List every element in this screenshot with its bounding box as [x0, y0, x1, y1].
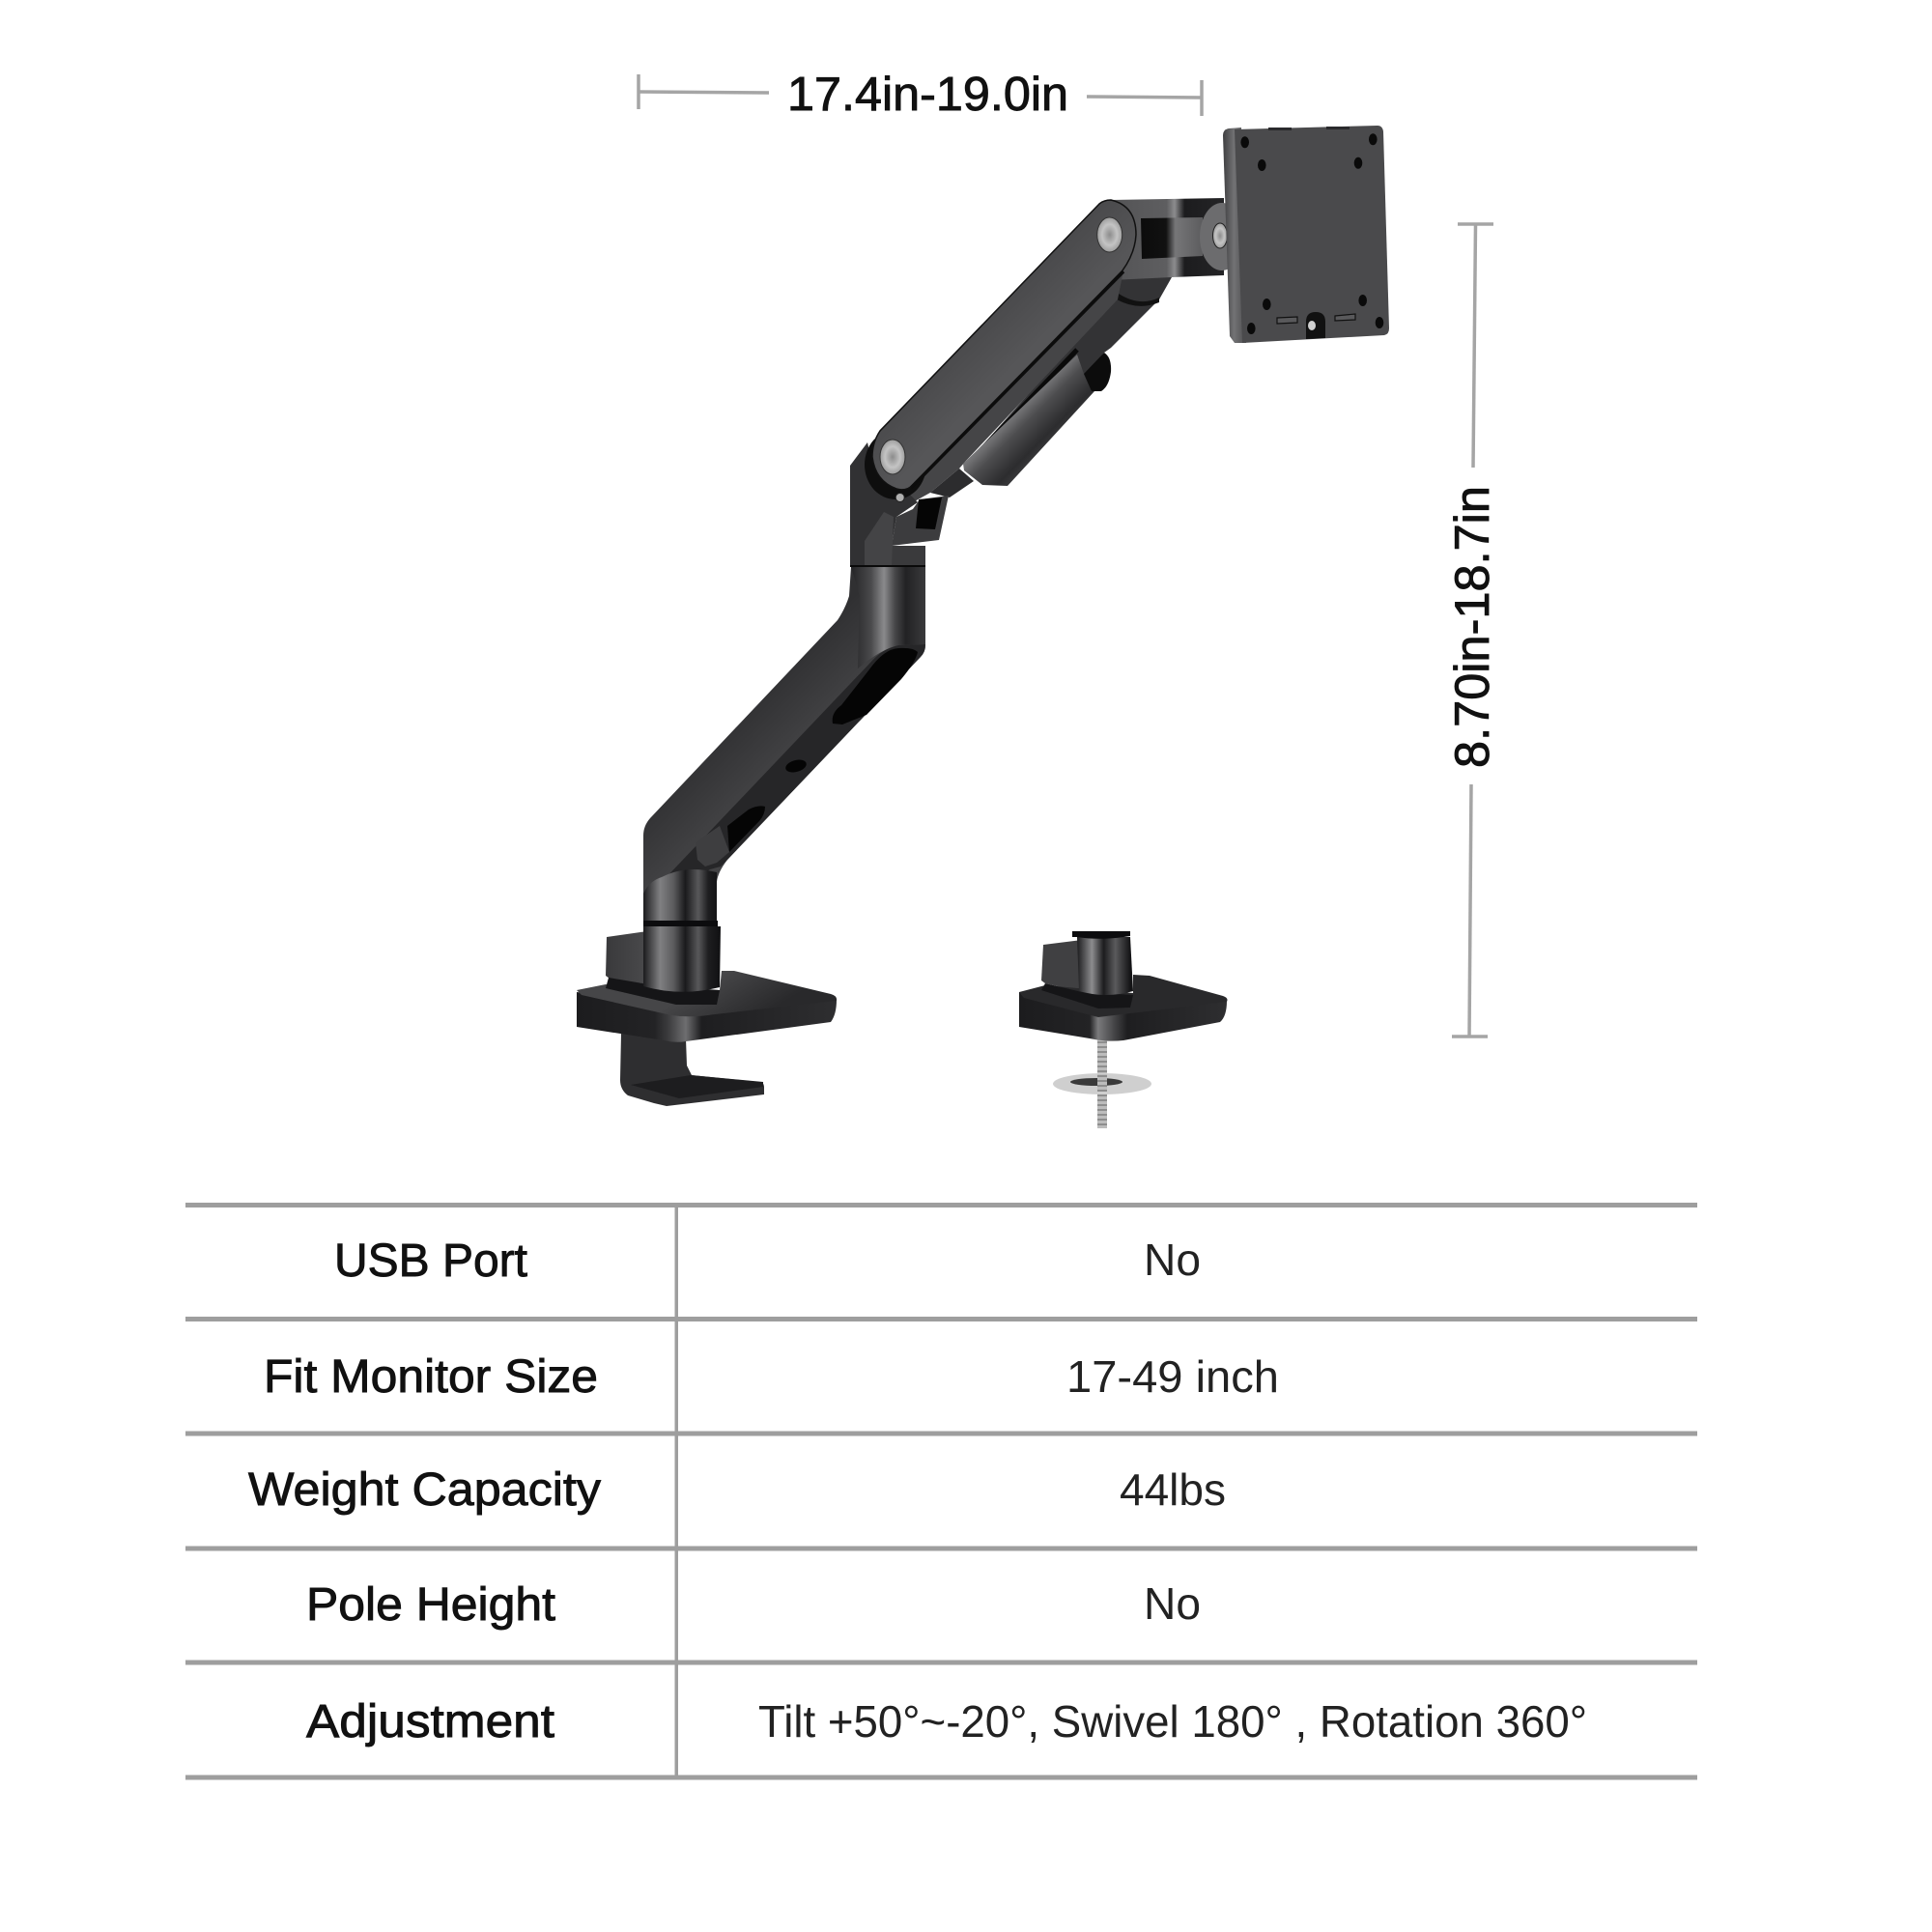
width dimension value: 17.4in-19.0in	[787, 69, 1068, 121]
clamp base top	[577, 971, 837, 1016]
clamp base sides	[577, 992, 837, 1042]
row: adjustment	[306, 1696, 1587, 1747]
large cable slot	[833, 648, 918, 724]
bolt base back plate	[1041, 940, 1082, 992]
clamp foot	[620, 1034, 764, 1106]
plate center notch	[1306, 312, 1325, 339]
washer opening	[1070, 1078, 1122, 1086]
upper joint yoke	[1111, 198, 1224, 280]
spring cover tube	[963, 355, 1094, 486]
separate bolt-through base	[1019, 931, 1227, 1128]
lower column	[643, 869, 717, 921]
monitor swivel disk	[1200, 203, 1244, 270]
vesa screw holes	[1240, 133, 1383, 334]
bolt base column cap	[1072, 931, 1130, 939]
inner column block	[696, 826, 729, 867]
bolt through washer	[1097, 1074, 1107, 1092]
row: pole height	[306, 1578, 1201, 1631]
plate top tabs	[1268, 127, 1350, 130]
specification table	[185, 1203, 1697, 1779]
plate slots	[1277, 314, 1355, 324]
width dimension right bracket	[1087, 80, 1202, 116]
width dimension left bracket	[639, 74, 769, 109]
row: usb port	[334, 1235, 1201, 1287]
tube open end	[1084, 353, 1111, 391]
swivel screw	[1213, 223, 1227, 248]
plate center screw	[1308, 321, 1316, 330]
row: usb port: USB Port	[334, 1236, 527, 1287]
column collar	[643, 921, 718, 926]
row: fit monitor size: Fit Monitor Size	[264, 1351, 598, 1403]
small hole in arm	[784, 757, 808, 775]
washer	[1053, 1073, 1151, 1094]
bolt base sides	[1019, 992, 1227, 1041]
lower pivot cap	[880, 440, 905, 474]
monitor arm product illustration	[577, 126, 1389, 1128]
table rules	[185, 1203, 1697, 1779]
upper pivot cap	[1097, 217, 1122, 252]
row: usb port: No	[1144, 1235, 1201, 1285]
vesa mounting plate	[1223, 126, 1389, 343]
threaded bolt	[1097, 1036, 1107, 1128]
gas spring tube	[966, 270, 1172, 464]
width dimension: arm reach	[639, 69, 1202, 121]
elbow joint body	[850, 442, 918, 567]
row: adjustment: Adjustment	[306, 1696, 554, 1747]
row: fit monitor size	[264, 1351, 1279, 1403]
row: weight capacity	[248, 1464, 1226, 1516]
row: pole height: No	[1144, 1578, 1201, 1629]
height dimension value: 8.70in-18.7in	[1445, 486, 1499, 768]
row: weight capacity: Weight Capacity	[248, 1464, 601, 1516]
bracket window	[916, 497, 942, 529]
bolt base column	[1077, 937, 1133, 995]
neck above collar	[892, 546, 925, 565]
tilt bracket below arm	[892, 496, 949, 546]
yoke window	[1141, 217, 1203, 259]
row: fit monitor size: 17-49 inch	[1066, 1351, 1279, 1402]
row: adjustment: Tilt +50°~-20°, Swivel 180° , Rotation 360°	[758, 1696, 1587, 1747]
plate front face	[1235, 126, 1389, 343]
bolt base shadow	[1041, 983, 1133, 1009]
strip screw	[895, 493, 904, 502]
column on clamp	[643, 926, 721, 992]
elbow collar line	[850, 565, 925, 567]
height dimension lower bracket	[1452, 784, 1488, 1037]
clamp foot top face	[631, 1075, 763, 1098]
plate side edge	[1223, 128, 1246, 343]
clamp shadow on base	[606, 978, 720, 1005]
row: weight capacity: 44lbs	[1120, 1464, 1226, 1515]
bolt base top	[1019, 975, 1227, 1017]
row: pole height: Pole Height	[306, 1579, 555, 1631]
gap under strip	[966, 350, 1077, 466]
elbow rim behind panel	[865, 430, 926, 499]
spring collar	[1117, 294, 1159, 306]
height dimension upper bracket	[1458, 224, 1493, 468]
second arm strip	[881, 270, 1123, 512]
gas strut cover panel	[872, 200, 1136, 490]
upper arm column	[851, 567, 925, 668]
clamp back plate	[606, 930, 654, 985]
lower arm underside	[663, 644, 925, 894]
elbow highlight	[865, 512, 894, 567]
lower arm body with column	[643, 567, 925, 921]
strip lower end block	[930, 469, 974, 497]
panel lower edge shadow	[911, 271, 1123, 488]
lower cable slot	[727, 806, 765, 852]
